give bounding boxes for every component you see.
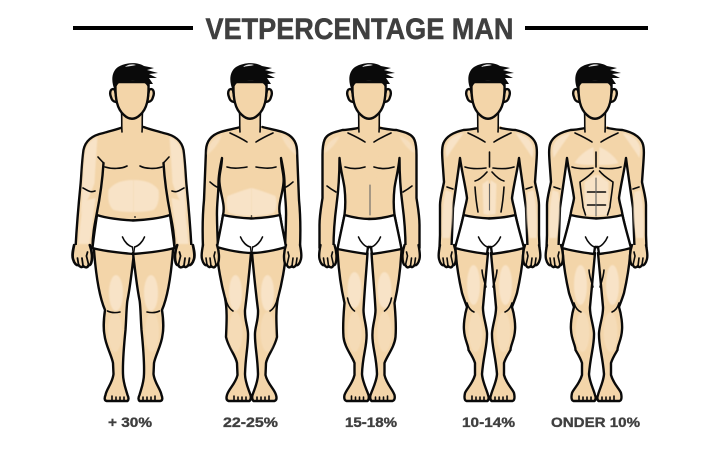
title: VETPERCENTAGE MAN xyxy=(206,13,514,46)
title rule: left xyxy=(73,26,193,30)
figure: 22-25 percent xyxy=(202,63,301,401)
figure: under 10 percent xyxy=(546,63,647,401)
label: over 30 percent: + 30% xyxy=(108,414,153,430)
label: 10-14 percent: 10-14% xyxy=(462,414,516,430)
figure: 10-14 percent xyxy=(439,63,540,401)
figure: over 30 percent xyxy=(73,63,194,401)
figure: 15-18 percent xyxy=(319,63,420,401)
label: 15-18 percent: 15-18% xyxy=(345,414,398,430)
label: under 10 percent: ONDER 10% xyxy=(551,414,641,430)
label: 22-25 percent: 22-25% xyxy=(223,414,279,430)
title rule: right xyxy=(525,26,648,30)
